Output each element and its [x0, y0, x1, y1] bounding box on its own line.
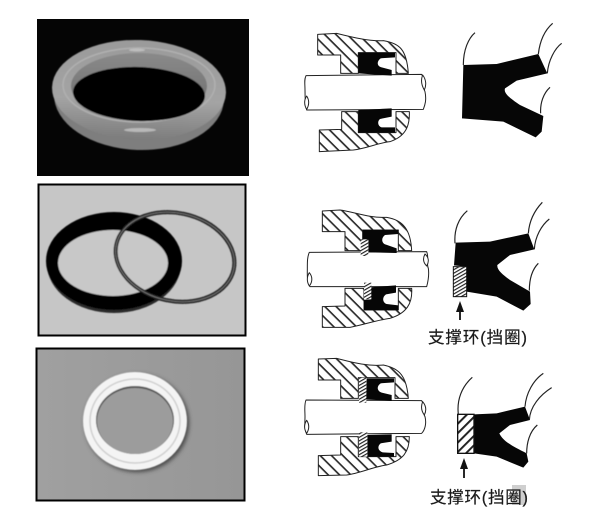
diagram: seal with backup ring in housing, row 2: [307, 210, 429, 327]
diagram: lip seal cross-section with backup ring, row 2: [453, 202, 549, 311]
diagram: seal with backup ring in housing, row 3: [305, 358, 426, 476]
photo: white seal ring on grey: [36, 348, 244, 500]
diagram: lip seal cross-section, row 1: [462, 23, 562, 137]
photo: black seal ring with thin backup ring: [38, 184, 246, 336]
arrow: pointing to backup ring, row 2: [456, 301, 464, 320]
diagram: lip seal cross-section with wide backup ring, row 3: [458, 373, 552, 468]
label: backup ring, row 2: 支撑环(挡圈): [428, 328, 527, 347]
diagram: seal installed in housing, row 1: [305, 33, 426, 152]
label: backup ring, row 3: 支撑环(挡圈): [430, 488, 528, 507]
photo: grey seal ring on black: [37, 19, 249, 176]
arrow: pointing to backup ring, row 3: [460, 458, 468, 478]
